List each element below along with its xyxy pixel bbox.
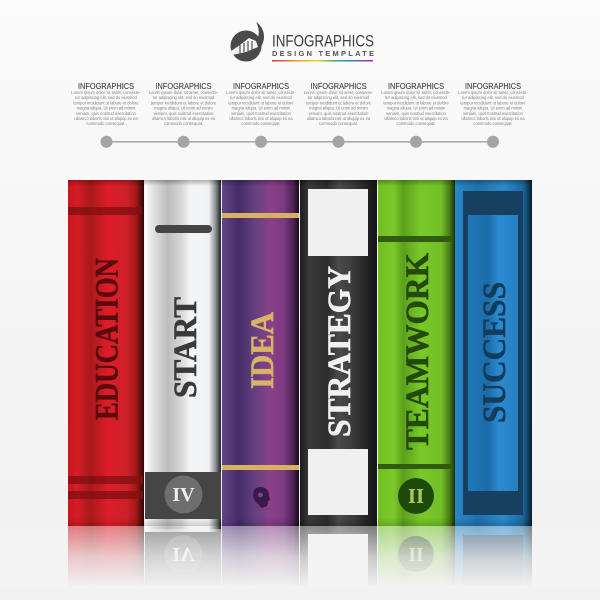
text column 5: commodo consequat. <box>396 121 436 126</box>
text column 3 <box>226 81 296 126</box>
text column 1: commodo consequat. <box>86 121 126 126</box>
book: EDUCATION: EDUCATION <box>90 258 126 420</box>
text column 1: tur adipiscing elit, sed do eiusmod <box>75 95 138 100</box>
text column 3: tempor incididunt ut labore et dolore <box>228 100 294 105</box>
text column 5: ullamco laboris nisi ut aliquip ex ea <box>384 116 448 121</box>
text column 5 <box>381 81 451 126</box>
text column 6: Lorem ipsum dolor sit amet, consecte- <box>458 90 528 95</box>
text column 6 <box>458 81 528 126</box>
rainbow line <box>272 60 373 62</box>
text column 2: veniam, quis nostrud exercitation <box>154 111 214 116</box>
book: START: IV <box>172 484 195 506</box>
text column 4: magna aliqua. Ut enim ad minim <box>309 106 368 111</box>
book: START <box>145 180 221 529</box>
text column 3: tur adipiscing elit, sed do eiusmod <box>230 95 293 100</box>
reflections: IV <box>172 543 195 565</box>
book: TEAMWORK: TEAMWORK <box>400 253 436 450</box>
icon: logo emblem <box>230 22 264 62</box>
book: STRATEGY <box>300 180 377 526</box>
text column 5: tur adipiscing elit, sed do eiusmod <box>385 95 448 100</box>
book: IDEA: IDEA <box>245 312 281 389</box>
text column 2: ullamco laboris nisi ut aliquip ex ea <box>152 116 216 121</box>
text column 3: veniam, quis nostrud exercitation <box>231 111 292 116</box>
book: STRATEGY: STRATEGY <box>322 266 358 437</box>
timeline <box>100 136 499 148</box>
reflections: II <box>408 543 424 565</box>
text column 2: tur adipiscing elit, sed do eiusmod <box>153 95 215 100</box>
text column 3: commodo consequat. <box>241 121 281 126</box>
text column 4: Lorem ipsum dolor sit amet, consecte- <box>304 90 374 95</box>
reflections <box>0 526 600 588</box>
text column 1 <box>71 81 141 126</box>
logo title: INFOGRAPHICS <box>272 32 374 50</box>
text column 6: magna aliqua. Ut enim ad minim <box>464 106 523 111</box>
text column 1: Lorem ipsum dolor sit amet, consecte- <box>71 90 141 95</box>
text column 5: INFOGRAPHICS <box>388 81 444 91</box>
text column 2: commodo consequat. <box>164 121 203 126</box>
text column 6: tempor incididunt ut labore et dolore <box>460 100 526 105</box>
text column 1: veniam, quis nostrud exercitation <box>76 111 137 116</box>
book: IDEA <box>222 180 299 526</box>
text column 6: commodo consequat. <box>473 121 513 126</box>
book: SUCCESS: SUCCESS <box>477 282 513 423</box>
logo subtitle: DESIGN TEMPLATE <box>272 49 374 58</box>
text column 5: magna aliqua. Ut enim ad minim <box>387 106 446 111</box>
text column 4 <box>304 81 374 126</box>
text column 3: magna aliqua. Ut enim ad minim <box>232 106 291 111</box>
book: TEAMWORK <box>378 180 455 526</box>
text column 5: Lorem ipsum dolor sit amet, consecte- <box>381 90 451 95</box>
text column 2: INFOGRAPHICS <box>156 81 212 91</box>
text column 1: ullamco laboris nisi ut aliquip ex ea <box>74 116 138 121</box>
text column 4: veniam, quis nostrud exercitation <box>309 111 369 116</box>
text column 1: tempor incididunt ut labore et dolore <box>73 100 139 105</box>
text column 4: ullamco laboris nisi ut aliquip ex ea <box>307 116 371 121</box>
icon: head with bulb <box>253 487 270 508</box>
text column 2: tempor incididunt ut labore et dolore <box>151 100 217 105</box>
logo <box>230 22 374 62</box>
book: TEAMWORK: II <box>408 484 424 508</box>
book: EDUCATION <box>68 180 144 526</box>
book: SUCCESS <box>455 180 532 526</box>
text column 5: tempor incididunt ut labore et dolore <box>383 100 449 105</box>
text column 1: magna aliqua. Ut enim ad minim <box>77 106 136 111</box>
text column 6: ullamco laboris nisi ut aliquip ex ea <box>461 116 525 121</box>
text column 3: ullamco laboris nisi ut aliquip ex ea <box>229 116 293 121</box>
text column 2 <box>149 81 219 126</box>
text column 2: magna aliqua. Ut enim ad minim <box>154 106 213 111</box>
book: START: START <box>168 297 204 398</box>
text column 2: Lorem ipsum dolor sit amet, consecte- <box>149 90 219 95</box>
text column 4: commodo consequat. <box>319 121 358 126</box>
text column 4: INFOGRAPHICS <box>310 81 367 91</box>
text column 4: tempor incididunt ut labore et dolore <box>306 100 372 105</box>
text column 1: INFOGRAPHICS <box>78 81 134 91</box>
text column 3: INFOGRAPHICS <box>233 81 289 91</box>
text column 6: INFOGRAPHICS <box>465 81 521 91</box>
text column 5: veniam, quis nostrud exercitation <box>386 111 447 116</box>
text column 4: tur adipiscing elit, sed do eiusmod <box>308 95 370 100</box>
text column 3: Lorem ipsum dolor sit amet, consecte- <box>226 90 296 95</box>
text column 6: tur adipiscing elit, sed do eiusmod <box>462 95 525 100</box>
text column 6: veniam, quis nostrud exercitation <box>463 111 524 116</box>
